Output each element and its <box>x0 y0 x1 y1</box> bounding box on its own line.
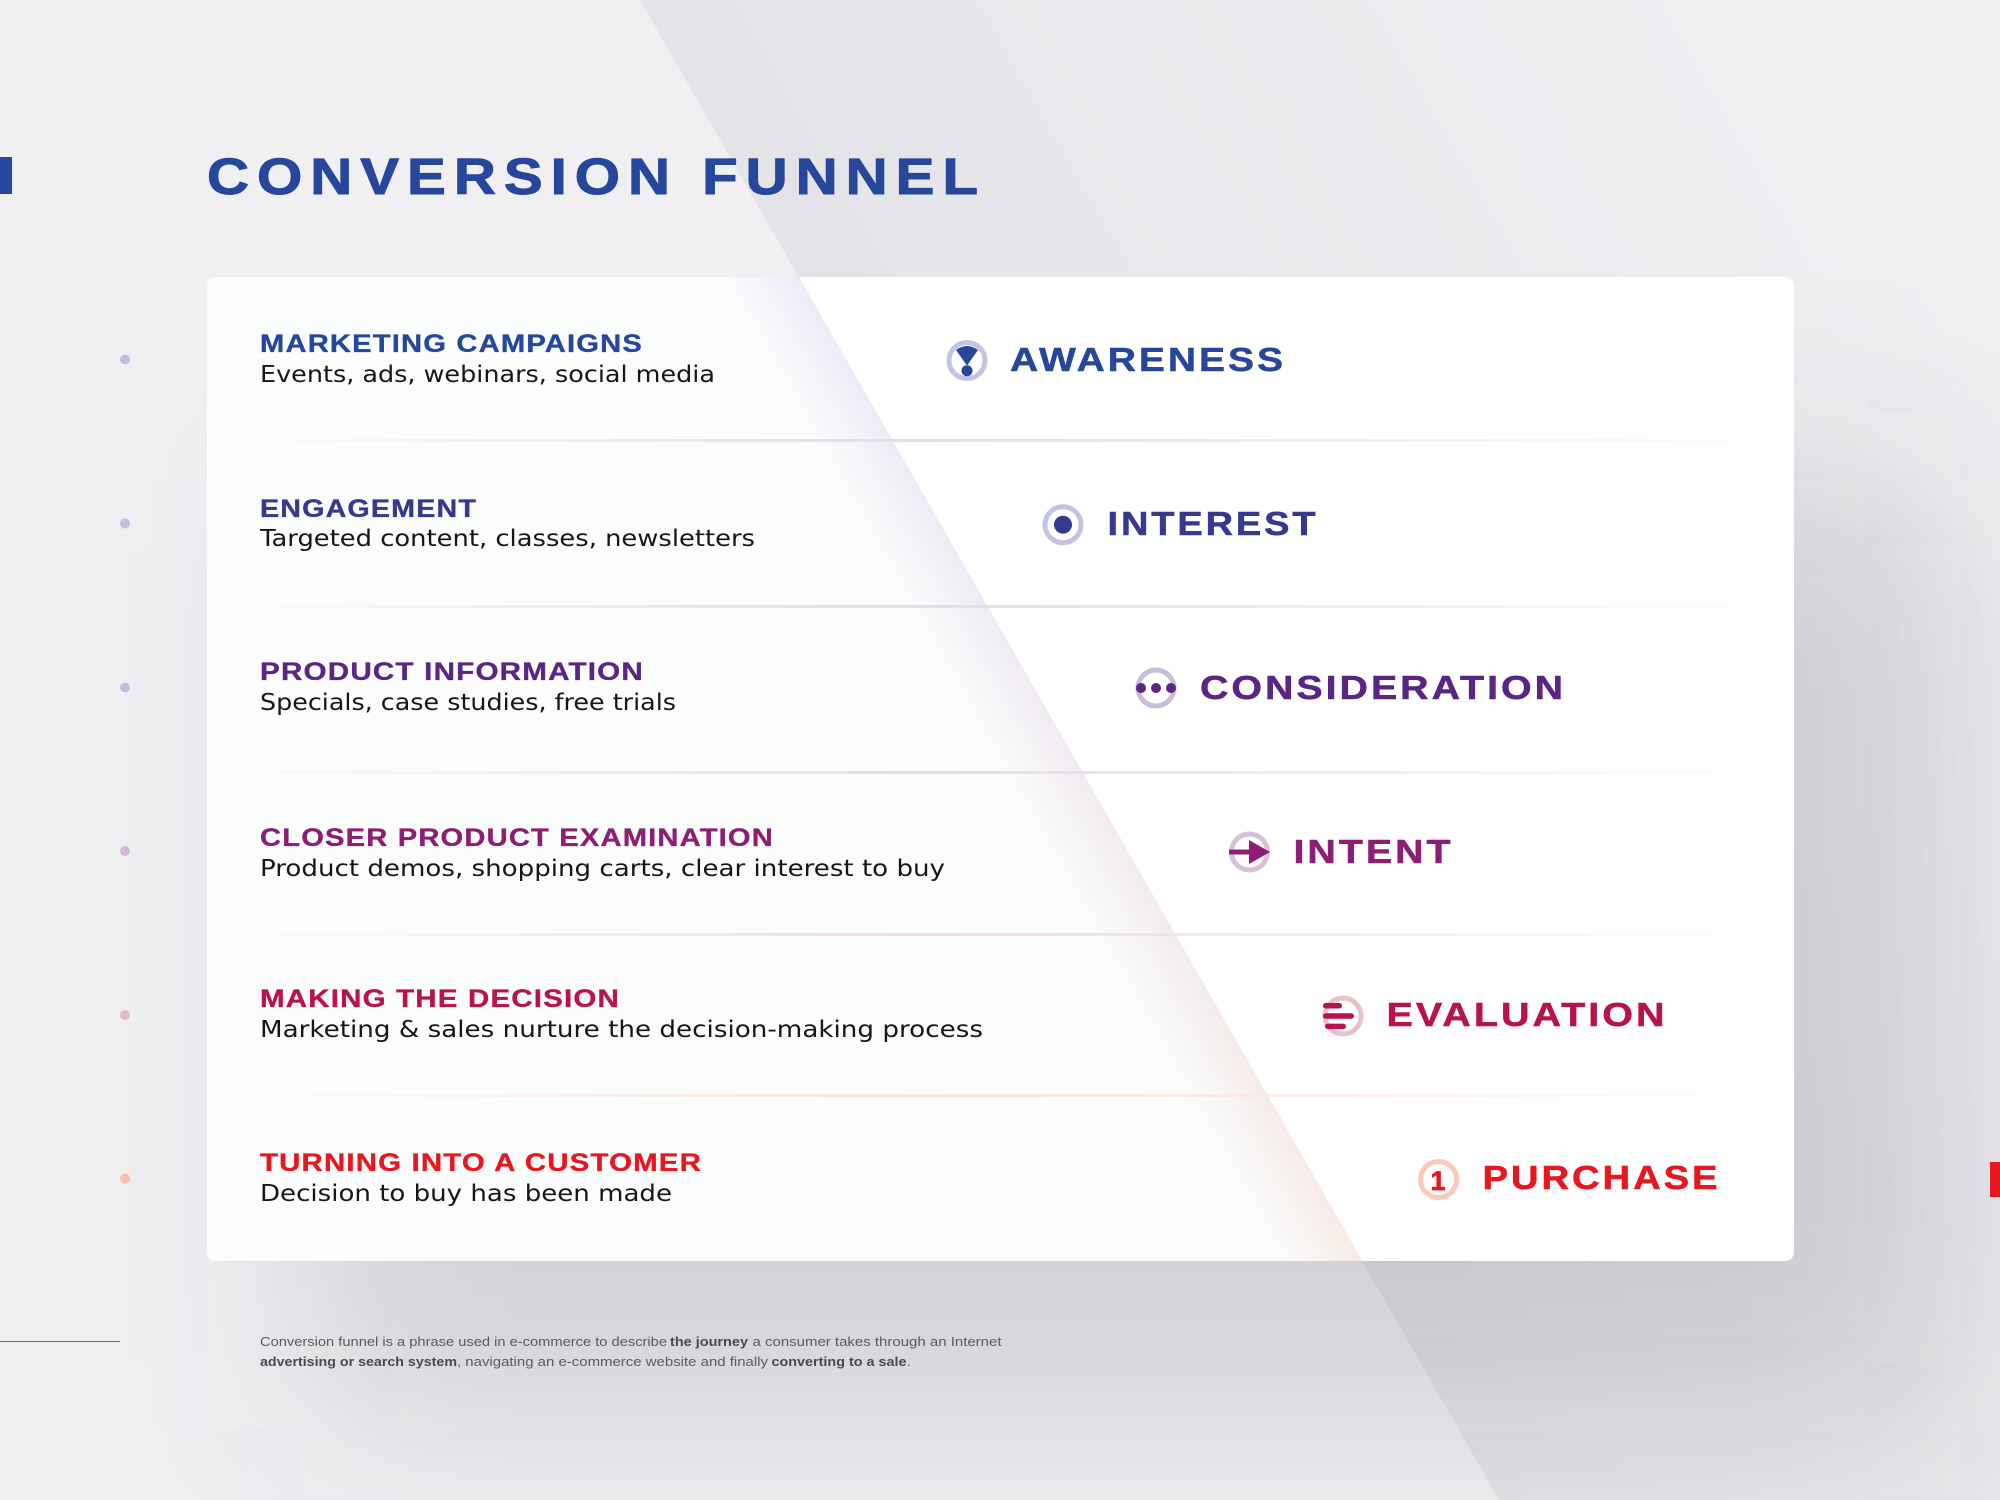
row description: Decision to buy has been made <box>260 1181 672 1207</box>
row: engagement / interest <box>259 495 1318 552</box>
row heading: PRODUCT INFORMATION <box>260 658 644 686</box>
row heading: CLOSER PRODUCT EXAMINATION <box>260 824 774 852</box>
row heading: MARKETING CAMPAIGNS <box>260 330 643 358</box>
card shadow <box>300 480 1960 1430</box>
stage label: EVALUATION <box>1386 996 1668 1033</box>
icon: intent arrow <box>1229 834 1270 870</box>
row: making the decision / evaluation <box>260 985 1668 1043</box>
background diagonal panel <box>640 0 2000 1500</box>
footnote text: , navigating an e-commerce website and finally <box>457 1354 769 1369</box>
card background <box>207 277 1794 1261</box>
row description: Targeted content, classes, newsletters <box>259 526 755 552</box>
row heading: MAKING THE DECISION <box>260 985 620 1013</box>
stage label: AWARENESS <box>1010 341 1286 378</box>
row heading: ENGAGEMENT <box>260 495 477 523</box>
footnote text: a consumer takes through an Internet <box>752 1334 1002 1349</box>
footnote leader line <box>0 1341 120 1342</box>
icon: interest target <box>1045 507 1081 543</box>
footnote text <box>260 1334 1002 1369</box>
card left tint <box>207 277 1362 1261</box>
timeline dots <box>120 354 130 1184</box>
accent bar right <box>1990 1162 2000 1197</box>
icon: awareness funnel <box>949 342 985 378</box>
row: product information / consideration <box>260 658 1566 716</box>
icon: purchase number one: 1 <box>1430 1166 1446 1196</box>
row description: Specials, case studies, free trials <box>260 690 676 716</box>
footnote text: . <box>907 1354 911 1369</box>
footnote text: converting to a sale <box>772 1354 906 1369</box>
icon: consideration dots <box>1136 670 1176 706</box>
row: turning into a customer / purchase <box>260 1149 1720 1207</box>
stage label: PURCHASE <box>1482 1159 1720 1196</box>
stage label: INTENT <box>1294 833 1454 870</box>
footnote text: the journey <box>670 1334 749 1349</box>
row heading: TURNING INTO A CUSTOMER <box>260 1149 702 1177</box>
title: CONVERSION FUNNEL <box>207 148 986 205</box>
row: closer product examination / intent <box>260 824 1454 882</box>
row description: Marketing & sales nurture the decision-making process <box>260 1017 983 1043</box>
footnote text: advertising or search system <box>260 1354 457 1369</box>
footnote text: Conversion funnel is a phrase used in e-commerce to describe <box>260 1334 667 1349</box>
title accent bar left <box>0 157 12 194</box>
row description: Events, ads, webinars, social media <box>260 362 715 388</box>
panel: funnel card <box>207 277 1794 1261</box>
stage label: INTEREST <box>1108 505 1318 542</box>
icon: purchase number one <box>1420 1162 1456 1198</box>
row: marketing campaigns / awareness <box>260 330 1286 388</box>
row description: Product demos, shopping carts, clear interest to buy <box>260 856 945 882</box>
stage label: CONSIDERATION <box>1200 669 1566 706</box>
icon: evaluation lines <box>1323 998 1361 1034</box>
diagonal shading band <box>762 277 1362 1261</box>
